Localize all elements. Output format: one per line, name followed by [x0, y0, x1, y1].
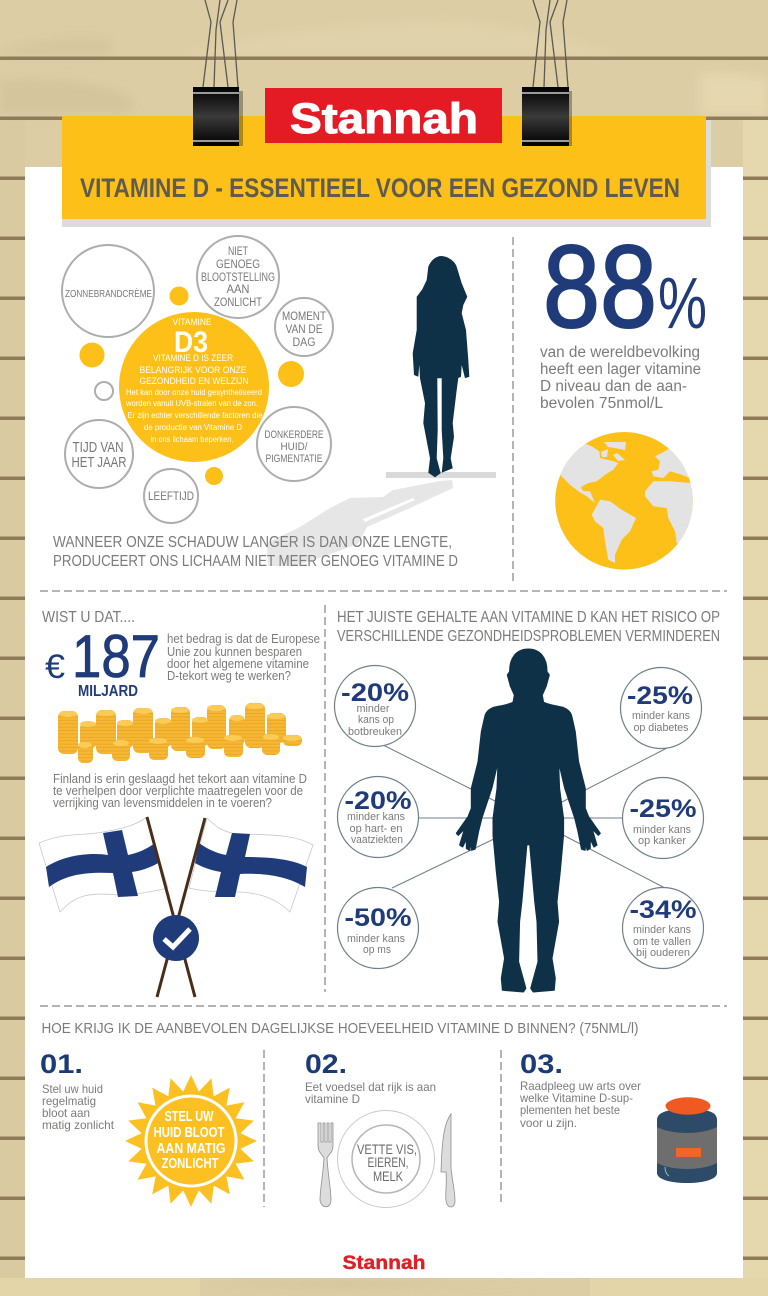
icon: crossed flag poles [147, 817, 205, 997]
icon: right finnish flag [189, 818, 313, 912]
heading: HOE KRIJG IK DE AANBEVOLEN DAGELIJKSE HOEVEELHEID VITAMINE D BINNEN? (75NML/l) [42, 1020, 638, 1037]
stat: botbreuken: botbreuken [348, 726, 402, 738]
finland text: te verhelpen door verplichte maatregelen voor de [53, 784, 303, 798]
icon: coin stacks [58, 703, 302, 763]
euro figure: € [45, 648, 65, 686]
factor: niet genoeg blootstelling: GENOEG [216, 259, 260, 271]
stat description: van de wereldbevolking [540, 344, 700, 361]
factor: niet genoeg blootstelling: ZONLICHT [214, 297, 262, 309]
stat: botbreuken: kans op [358, 714, 394, 726]
finland text [53, 772, 307, 810]
stannah logo [265, 88, 502, 143]
step 03 [519, 1049, 717, 1183]
factor: tijd van het jaar [65, 420, 133, 488]
central d3 circle: Er zijn echter verschillende factoren die [128, 411, 263, 420]
icon: knife [441, 1114, 455, 1207]
shadow explanation text: PRODUCEERT ONS LICHAAM NIET MEER GENOEG VITAMINE D [53, 553, 458, 570]
step 02: Eet voedsel dat rijk is aan [305, 1080, 436, 1094]
heading: WIST U DAT.... [42, 609, 135, 626]
ground bar [386, 472, 496, 478]
stat: vallen bij ouderen [622, 888, 704, 968]
header banner [62, 116, 711, 227]
step 01: Stel uw huid [42, 1082, 103, 1096]
factor: donkerdere huid: DONKERDERE [264, 429, 324, 441]
step 03: 03. [520, 1049, 563, 1079]
factor: niet genoeg blootstelling: AAN [226, 284, 250, 296]
footer stannah logo: Stannah [342, 1253, 426, 1274]
central d3 circle [119, 312, 269, 462]
factor: moment van de dag: DAG [292, 337, 316, 349]
factor: leeftijd [144, 469, 198, 523]
step 01 [40, 1049, 257, 1207]
step 01: bloot aan [42, 1106, 90, 1120]
factor: donkerdere huid: HUID/ [280, 441, 308, 453]
icon: plate [338, 1110, 434, 1208]
icon: sun: ZONLICHT [162, 1156, 219, 1172]
stat: botbreuken: minder [356, 703, 390, 715]
factor: donkerdere huid: PIGMENTATIE [266, 453, 322, 465]
finland text: Finland is erin geslaagd het tekort aan vitamine D [53, 772, 307, 786]
central d3 circle: worden vanuit UVB-stralen van de zon. [125, 399, 258, 408]
factor: zonnebrandcreme: ZONNEBRANDCRÈME [65, 287, 152, 300]
euro description: Unie zou kunnen besparen [167, 645, 302, 659]
stat: diabetes [620, 668, 702, 748]
icon: fork [318, 1123, 333, 1207]
stat description: heeft een lager vitamine [540, 361, 701, 378]
factor: tijd van het jaar: HET JAAR [72, 454, 127, 471]
icon: globe [550, 431, 697, 570]
stat: hart en vaatziekten: minder kans [347, 811, 405, 823]
factor: moment van de dag: MOMENT [282, 311, 326, 323]
factor: niet genoeg blootstelling: BLOOTSTELLING [201, 272, 275, 284]
euro description: door het algemene vitamine [167, 657, 309, 671]
finland text: verrijking van levensmiddelen in te voeren? [53, 796, 272, 810]
icon: sun [125, 1075, 257, 1207]
central d3 circle: GEZONDHEID EN WELZIJN [140, 376, 249, 387]
stat: 88 percent: % [658, 264, 707, 344]
icon: plate: EIEREN, [368, 1155, 408, 1170]
euro figure [45, 623, 160, 700]
stat description: D niveau dan de aan- [540, 378, 687, 395]
health risk panel [334, 609, 720, 992]
factor: zonnebrandcreme [62, 245, 154, 337]
central d3 circle: in ons lichaam beperken. [150, 435, 234, 444]
stat: ms [338, 888, 418, 968]
stat description: bevolen 75nmol/L [540, 395, 663, 412]
stat: hart en vaatziekten: -20% [344, 787, 412, 815]
stat: vallen bij ouderen: om te vallen [633, 936, 691, 948]
icon: sun: STEL UW [164, 1109, 214, 1125]
euro description: het bedrag is dat de Europese [167, 632, 320, 646]
stat description [540, 344, 701, 412]
step 02: vitamine D [305, 1092, 360, 1106]
icon: plate: MELK [373, 1169, 403, 1184]
step 03: welke Vitamine D-sup- [519, 1091, 633, 1105]
factor: tijd van het jaar: TIJD VAN [72, 439, 124, 456]
icon: sun: AAN MATIG [156, 1141, 226, 1157]
decorative dots [80, 286, 304, 485]
stat: kanker: op kanker [638, 835, 686, 847]
binder clip right [522, 0, 572, 146]
icon: left finnish flag [39, 817, 168, 912]
euro description [167, 632, 320, 683]
stat: botbreuken: -20% [341, 679, 409, 707]
central d3 circle: Het kan door onze huid gesynthetiseerd [126, 388, 262, 397]
step 02 [305, 1049, 455, 1208]
icon: sun: HUID BLOOT [154, 1125, 225, 1141]
stat: kanker: -25% [630, 795, 696, 823]
body silhouette [457, 649, 600, 992]
central d3 circle: VITAMINE [172, 317, 212, 328]
step 01: regelmatig [42, 1094, 96, 1108]
icon: plate: VETTE VIS, [357, 1142, 417, 1157]
shadow explanation text: WANNEER ONZE SCHADUW LANGER IS DAN ONZE LENGTE, [53, 534, 452, 551]
stat: 88 percent: 88 [543, 221, 657, 352]
euro description: D-tekort weg te werken? [167, 669, 291, 683]
silhouette [413, 256, 469, 477]
step 01: 01. [40, 1049, 83, 1079]
stat: diabetes: op diabetes [634, 722, 689, 734]
stat: vallen bij ouderen: bij ouderen [636, 947, 690, 959]
stat: ms: minder kans [347, 933, 405, 945]
factor: niet genoeg blootstelling: NIET [228, 246, 248, 258]
euro figure: 187 [72, 623, 160, 690]
stat: hart en vaatziekten: op hart- en [350, 823, 402, 835]
stat: 88 percent [540, 221, 707, 412]
factor: donkerdere huid [257, 407, 331, 481]
step 03: plementen het beste [520, 1103, 620, 1117]
heading [337, 609, 720, 645]
stannah logo: Stannah [290, 95, 478, 143]
euro figure: MILJARD [78, 683, 138, 700]
stat: vallen bij ouderen: minder kans [633, 924, 691, 936]
central d3 circle: VITAMINE D IS ZEER [153, 353, 233, 364]
connector lines [383, 745, 667, 888]
binder clip left [193, 0, 243, 146]
stat: diabetes: minder kans [632, 710, 690, 722]
daily intake section [40, 1020, 717, 1208]
central d3 circle: de productie van Vitamine D [144, 423, 242, 432]
step 02: 02. [305, 1049, 347, 1079]
central d3 circle: D3 [174, 326, 208, 359]
dashed dividers [40, 237, 727, 1207]
shadow explanation text [53, 534, 458, 570]
step 01: matig zonlicht [42, 1118, 115, 1132]
factor: moment van de dag [275, 298, 333, 356]
stat: vallen bij ouderen: -34% [630, 896, 696, 924]
central d3 circle: BELANGRIJK VOOR ONZE [140, 365, 246, 376]
factor: moment van de dag: VAN DE [286, 324, 323, 336]
step 03: voor u zijn. [520, 1116, 577, 1130]
stat: kanker: minder kans [633, 824, 691, 836]
stat: hart en vaatziekten: vaatziekten [351, 834, 403, 846]
shadow [267, 480, 453, 566]
step 03: Raadpleeg uw arts over [520, 1079, 641, 1093]
wist u dat panel [39, 609, 320, 997]
stat: botbreuken [334, 666, 416, 746]
stat: hart en vaatziekten [338, 776, 418, 858]
icon: check badge [153, 915, 199, 961]
stat: kanker [622, 778, 704, 858]
icon: supplement bottle [657, 1097, 717, 1183]
stat: ms: op ms [363, 944, 391, 956]
woman silhouette with shadow [267, 256, 496, 566]
vitamin d3 factor diagram [62, 236, 333, 523]
stat: ms: -50% [344, 904, 412, 932]
factor: niet genoeg blootstelling [197, 236, 279, 318]
stat: diabetes: -25% [627, 682, 693, 710]
factor: leeftijd: LEEFTIJD [148, 491, 194, 503]
